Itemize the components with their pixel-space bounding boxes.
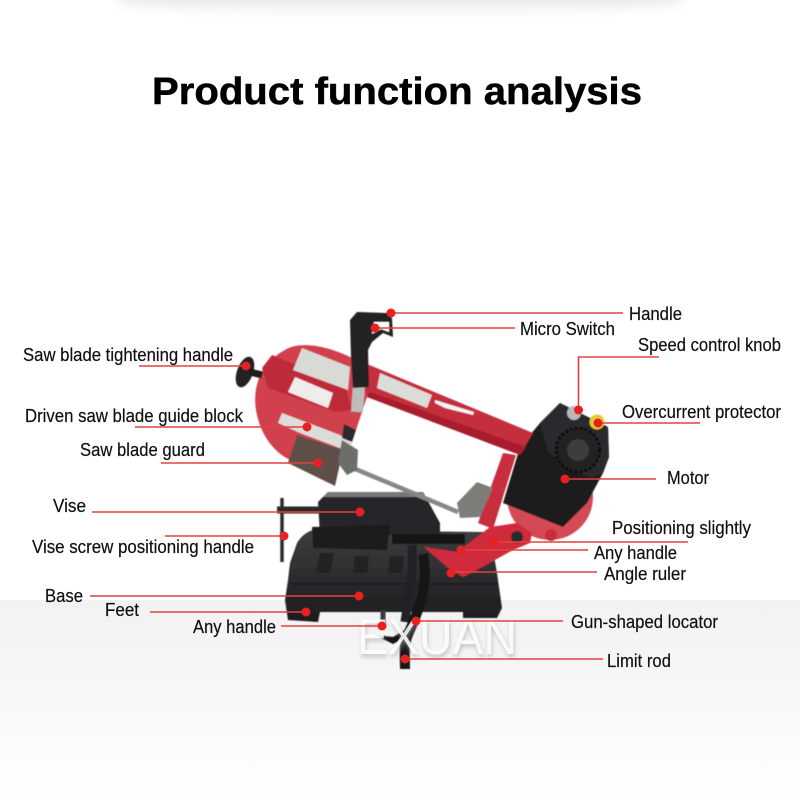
callout: Saw blade guard: Saw blade guard [80, 440, 205, 460]
callout: Overcurrent protector [594, 402, 781, 428]
callout: Speed control knob: Speed control knob [638, 335, 781, 355]
arm grey panel [377, 373, 432, 408]
top shadow [115, 0, 685, 17]
band saw product illustration [232, 312, 609, 669]
blade guard [288, 435, 343, 486]
pivot arm [424, 523, 532, 577]
callout: Angle ruler: Angle ruler [604, 564, 686, 584]
vise moving jaw [312, 525, 390, 550]
callout: Any handle left [193, 617, 386, 637]
housing rim [262, 355, 352, 412]
callout: Base: Base [45, 586, 83, 606]
callout: Vise: Vise [53, 496, 86, 516]
callout: Gun-shaped locator [412, 612, 718, 632]
motor fan hub [567, 439, 589, 461]
callout: Gun-shaped locator: Gun-shaped locator [571, 612, 718, 632]
title: Product function analysis [152, 71, 642, 113]
guide block [278, 413, 353, 450]
wheel housing [255, 345, 367, 462]
callout: Overcurrent protector: Overcurrent protector [622, 402, 781, 422]
callout: Motor: Motor [667, 468, 709, 488]
vise clamp [392, 534, 465, 544]
callout: Limit rod: Limit rod [607, 651, 671, 671]
callout: Driven saw blade guide block: Driven saw blade guide block [25, 406, 244, 426]
tightening knob [232, 354, 258, 390]
foot block [380, 610, 386, 627]
right blade guide [457, 482, 493, 518]
callout: Vise screw positioning handle: Vise screw positioning handle [32, 537, 254, 557]
blade [353, 468, 458, 512]
direction arrow [435, 400, 474, 415]
callout: Handle: Handle [629, 304, 682, 324]
watermark: EXUAN [357, 609, 517, 665]
upper arm [350, 357, 533, 455]
callout: Any handle right [456, 543, 677, 563]
motor cap [540, 403, 609, 478]
callout: Positioning slightly [490, 518, 751, 546]
callout: Saw blade guard [80, 440, 322, 468]
callout: Angle ruler [446, 564, 686, 584]
column [478, 453, 516, 529]
red disc behind motor [507, 454, 593, 540]
callout: Micro Switch: Micro Switch [520, 319, 615, 339]
callout: Speed control knob [574, 335, 781, 414]
callout: Base [45, 586, 364, 606]
callout: Motor [560, 468, 709, 488]
housing grey panel [293, 348, 350, 390]
lower handle [375, 628, 412, 644]
pivot bolt [511, 531, 523, 543]
vise rear jaw highlight [323, 492, 426, 497]
base slots [316, 553, 404, 573]
knob stem [250, 372, 262, 375]
locator rear [405, 545, 412, 622]
motor [503, 403, 609, 527]
handle hole [372, 322, 389, 334]
base [285, 530, 502, 622]
callout: Any handle left: Any handle [193, 617, 276, 637]
guide bolt [342, 424, 356, 442]
bottom grey band [0, 600, 800, 800]
positioning button [545, 529, 557, 541]
callout: Handle [386, 304, 682, 324]
handle tube [357, 385, 359, 412]
motor fan [556, 428, 600, 472]
callout: Saw blade tightening handle: Saw blade tightening handle [23, 345, 233, 365]
callout: Limit rod [400, 651, 671, 671]
left blade guide [338, 440, 358, 475]
vise screw bar [277, 506, 320, 514]
housing white label [288, 377, 333, 408]
handle grip [350, 312, 393, 388]
callout: Vise [53, 496, 364, 516]
callout: Driven saw blade guide block [25, 406, 312, 432]
speed knob [567, 406, 581, 420]
callout: Positioning slightly: Positioning slightly [612, 518, 751, 538]
callout: Feet: Feet [105, 600, 139, 620]
base lip [290, 583, 497, 585]
vise rear jaw [318, 492, 440, 535]
callout: Micro Switch [370, 319, 615, 339]
limit rod [405, 554, 425, 669]
callout: Any handle right: Any handle [594, 543, 677, 563]
callout: Feet [105, 600, 310, 620]
arm shading [367, 392, 526, 455]
protector button [590, 414, 604, 430]
vise screw [280, 498, 284, 562]
